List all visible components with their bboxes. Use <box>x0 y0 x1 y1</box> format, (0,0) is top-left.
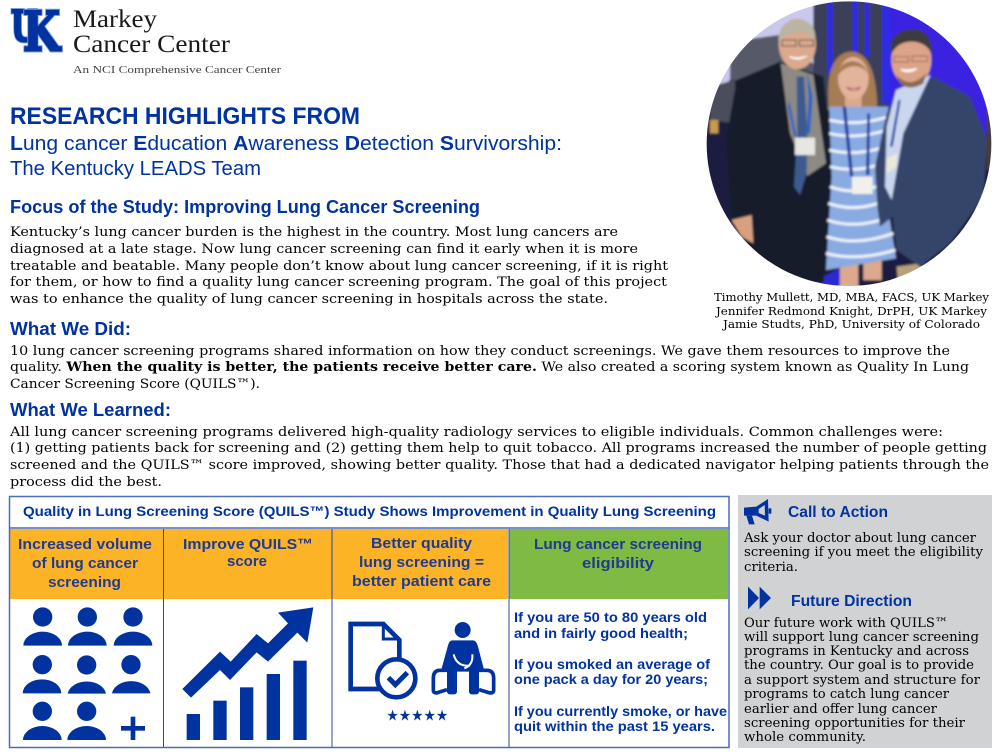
table title: Quality in Lung Screening Score (QUILS™) Study Shows Improvement in Quality Lung Screening <box>23 503 716 519</box>
future direction: earlier and offer lung cancer <box>744 702 938 717</box>
section: focus of the study: Focus of the Study: Improving Lung Cancer Screening <box>10 197 480 217</box>
column 3: better quality: better patient care <box>352 573 491 590</box>
icon: people group with plus <box>23 607 152 740</box>
woman <box>826 52 896 290</box>
section: what we learned: process did the best. <box>10 475 162 490</box>
future direction: a support system and structure for <box>744 673 981 688</box>
icon: document check and seated patient: ★★★★★ <box>386 706 448 724</box>
future direction: screening opportunities for their <box>744 716 966 731</box>
section: what we learned: All lung cancer screening programs delivered high-quality radiology services to eligible individuals. Common challenges were: <box>9 425 943 440</box>
column 4: eligibility <box>514 536 727 734</box>
column 4: eligibility: eligibility <box>582 555 655 572</box>
icon: document check and seated patient <box>351 622 494 724</box>
icon: rising bars and arrow <box>182 607 313 740</box>
eligibility criteria: If you smoked an average of <box>514 656 710 672</box>
title block <box>10 103 562 180</box>
future direction: whole community. <box>744 730 866 745</box>
icon: megaphone <box>744 499 771 524</box>
section: what we did: Cancer Screening Score (QUILS™). <box>10 377 260 392</box>
logo name: Markey <box>73 6 158 33</box>
logo name <box>73 6 281 76</box>
logo name: An NCI Comprehensive Cancer Center <box>73 64 281 76</box>
section: focus of the study: for them, or how to find a quality lung cancer screening program. The goal of this project <box>10 275 668 290</box>
icon: UK mark: K <box>23 0 62 64</box>
icon: UK mark <box>11 0 62 64</box>
section: focus of the study: Kentucky’s lung cancer burden is the highest in the country. Most lung cancers are <box>10 225 618 240</box>
logo name: Cancer Center <box>73 31 231 58</box>
right man <box>875 29 987 287</box>
eligibility criteria: If you currently smoke, or have <box>514 703 727 719</box>
future direction: programs in Kentucky and across <box>744 644 969 659</box>
column 3: better quality: Better quality <box>371 535 473 552</box>
title block: The Kentucky LEADS Team <box>10 158 261 180</box>
logo: UK Markey Cancer Center <box>11 0 281 76</box>
call to action: criteria. <box>744 560 798 575</box>
section: what we did: What We Did: <box>10 319 131 339</box>
icon: fast forward chevrons <box>748 587 771 609</box>
section: what we did: 10 lung cancer screening programs shared information on how they conduct screenings. We gave them resources to improve the <box>10 344 950 359</box>
future direction: the country. Our goal is to provide <box>744 658 974 673</box>
section: what we learned: screened and the QUILS™ score improved, showing better quality. Those that had a dedicated navigator helping patients through the <box>10 458 989 473</box>
future direction <box>744 593 981 745</box>
eligibility criteria: one pack a day for 20 years; <box>514 671 708 687</box>
panel: QUILS study table <box>10 496 729 748</box>
icon: UK mark: U <box>11 2 37 51</box>
section: focus of the study: treatable and beatable. Many people don’t know about lung cancer screening, if it is right <box>10 259 669 274</box>
future direction: Future Direction <box>791 593 912 610</box>
section: what we learned: What We Learned: <box>10 400 171 420</box>
eligibility criteria: and in fairly good health; <box>514 625 688 641</box>
title block: Lung cancer Education Awareness Detection Survivorship: <box>10 133 562 155</box>
section: what we learned <box>9 400 989 490</box>
column 2: improve score: Improve QUILS™ <box>183 536 313 553</box>
left man <box>726 19 834 283</box>
eligibility criteria: quit within the past 15 years. <box>514 718 715 734</box>
section: what we did <box>10 319 969 392</box>
photo caption: Timothy Mullett, MD, MBA, FACS, UK Markey <box>714 291 990 304</box>
section: focus of the study <box>10 197 669 307</box>
column 2: improve score: score <box>227 553 267 570</box>
future direction: Our future work with QUILS™ <box>744 616 948 631</box>
icon: UK mark: U <box>11 2 37 51</box>
panel: call to action and future direction <box>738 495 992 748</box>
column 3: better quality <box>351 535 494 724</box>
column header backgrounds <box>10 529 728 599</box>
section: what we learned: (1) getting patients back for screening and (2) getting them help to quit tobacco. All programs increased the number of people getting <box>10 441 987 456</box>
future direction: programs to catch lung cancer <box>744 687 950 702</box>
eligibility criteria <box>514 609 727 734</box>
column 1: increased volume: Increased volume <box>18 536 152 553</box>
column 1: increased volume: of lung cancer <box>32 555 138 572</box>
photo caption: Jamie Studts, PhD, University of Colorado <box>722 318 980 331</box>
call to action: Ask your doctor about lung cancer <box>743 531 977 546</box>
title block: RESEARCH HIGHLIGHTS FROM <box>10 103 360 130</box>
photo caption: Jennifer Redmond Knight, DrPH, UK Markey <box>715 305 988 318</box>
column 1: increased volume <box>18 536 152 740</box>
icon: UK mark: K <box>23 0 62 64</box>
section: focus of the study: diagnosed at a late stage. Now lung cancer screening can find it early when it is more <box>10 242 638 257</box>
photo caption <box>714 291 990 331</box>
column 1: increased volume: screening <box>48 574 121 591</box>
eligibility criteria: If you are 50 to 80 years old <box>514 609 707 625</box>
column 4: eligibility: Lung cancer screening <box>534 536 702 553</box>
call to action: screening if you meet the eligibility <box>744 545 984 560</box>
future direction: will support lung cancer screening <box>744 630 979 645</box>
section: focus of the study: was to enhance the quality of lung cancer screening in hospitals across the state. <box>10 292 608 307</box>
column 2: improve score <box>182 536 313 740</box>
call to action: Call to Action <box>788 504 888 521</box>
section: what we did: quality. When the quality is better, the patients receive better care. We also created a scoring system known as Quality In Lung <box>10 360 969 375</box>
column 3: better quality: lung screening = <box>359 554 484 571</box>
call to action <box>743 504 984 575</box>
photo: three researchers <box>700 0 1000 293</box>
